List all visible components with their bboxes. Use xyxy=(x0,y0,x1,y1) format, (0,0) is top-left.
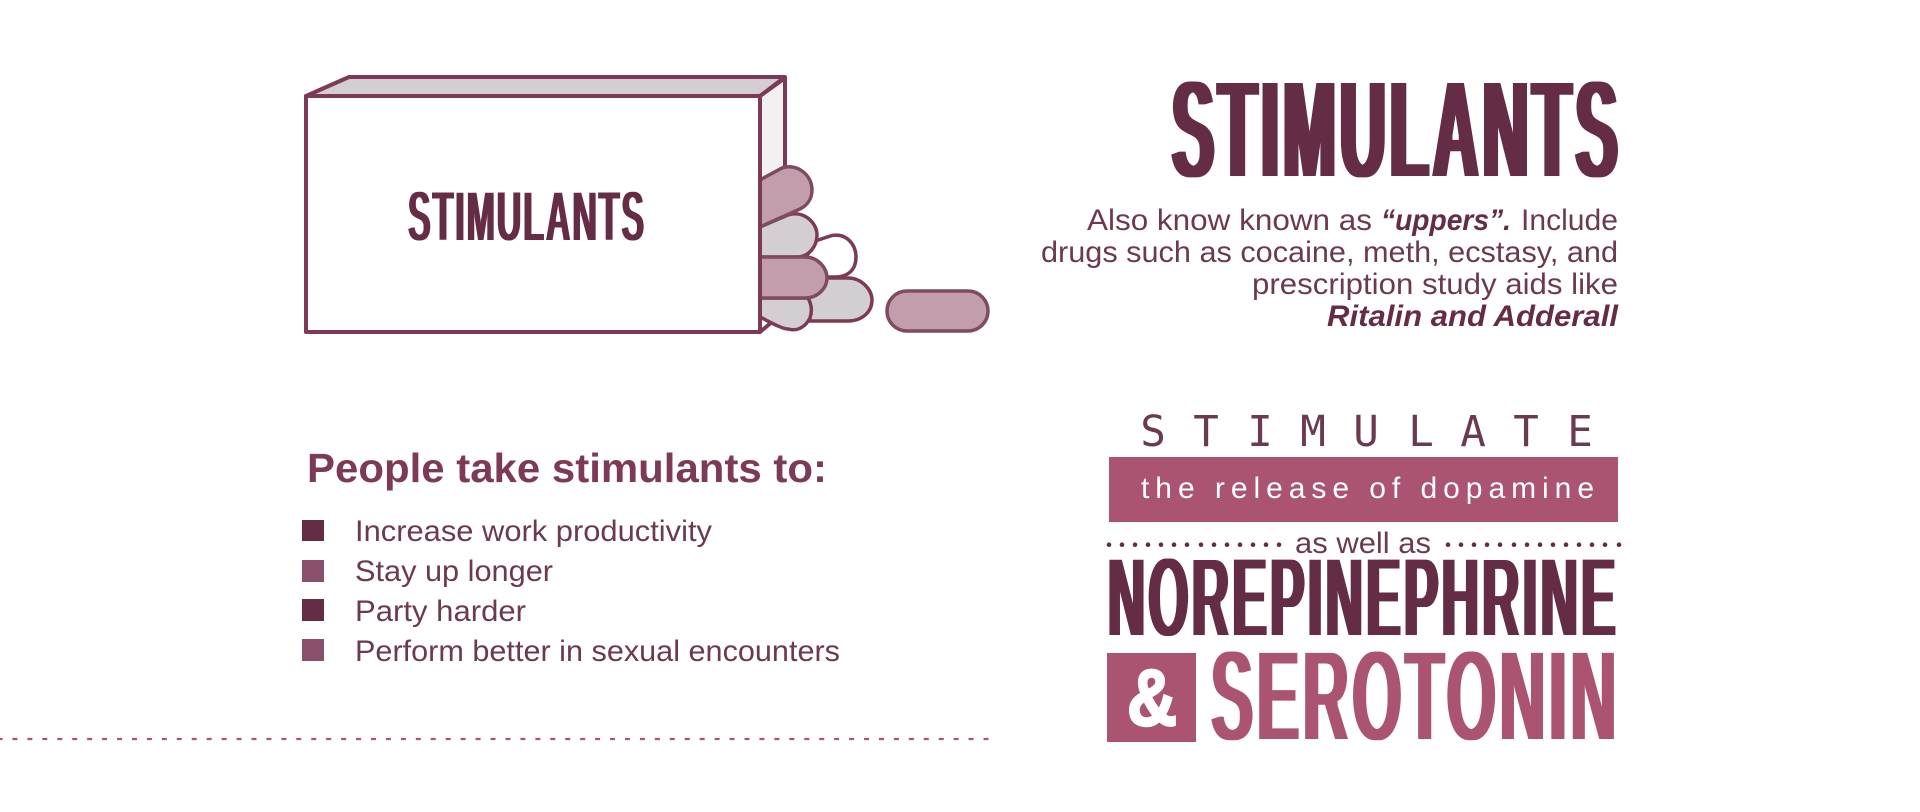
box side face xyxy=(760,78,785,190)
as well as divider: as well as xyxy=(1295,527,1431,560)
dopamine banner xyxy=(1109,457,1618,522)
box front face xyxy=(306,96,760,332)
stimulate heading: A xyxy=(1460,408,1486,457)
stimulate heading: I xyxy=(1247,408,1273,457)
item: work productivity: Increase work productivity xyxy=(355,515,712,548)
illustration: pill box with pills xyxy=(306,77,988,332)
gray pill small xyxy=(760,298,811,330)
rose pill tilted xyxy=(760,167,812,227)
gray pill lower xyxy=(790,278,872,321)
illustration: pill box with pills: STIMULANTS xyxy=(408,178,646,257)
stimulate heading xyxy=(1140,408,1593,457)
reasons list xyxy=(302,515,840,668)
heading: people take stimulants: People take stimulants to: xyxy=(307,445,827,491)
stimulate heading: U xyxy=(1353,408,1379,457)
item: sexual encounters: Perform better in sexual encounters xyxy=(355,635,840,668)
ampersand box xyxy=(1107,653,1196,742)
ampersand box: & xyxy=(1127,653,1177,742)
item: stay up longer: Stay up longer xyxy=(355,555,553,588)
gray pill upper xyxy=(760,214,817,257)
box top face xyxy=(306,77,785,96)
description text xyxy=(1041,204,1619,333)
loose pill xyxy=(887,291,988,331)
stimulate heading: S xyxy=(1140,408,1166,457)
stimulate heading: E xyxy=(1567,408,1593,457)
description text: Ritalin and Adderall xyxy=(1327,300,1619,333)
description text: Include xyxy=(1521,204,1618,237)
dopamine banner: the release of dopamine xyxy=(1141,472,1594,505)
as well as divider xyxy=(1107,527,1621,560)
stimulate heading: T xyxy=(1513,408,1539,457)
description text: drugs such as cocaine, meth, ecstasy, and xyxy=(1041,236,1618,269)
description text: prescription study aids like xyxy=(1252,268,1618,301)
description text: Also know known as xyxy=(1087,204,1372,237)
rose pill horizontal xyxy=(760,257,827,298)
box corner xyxy=(760,322,772,332)
description text: “uppers”. xyxy=(1381,204,1511,237)
stimulate heading: T xyxy=(1193,408,1219,457)
stimulate heading: L xyxy=(1408,408,1434,457)
stimulate heading: M xyxy=(1300,408,1326,457)
white pill xyxy=(800,235,856,277)
item: party harder: Party harder xyxy=(355,595,526,628)
